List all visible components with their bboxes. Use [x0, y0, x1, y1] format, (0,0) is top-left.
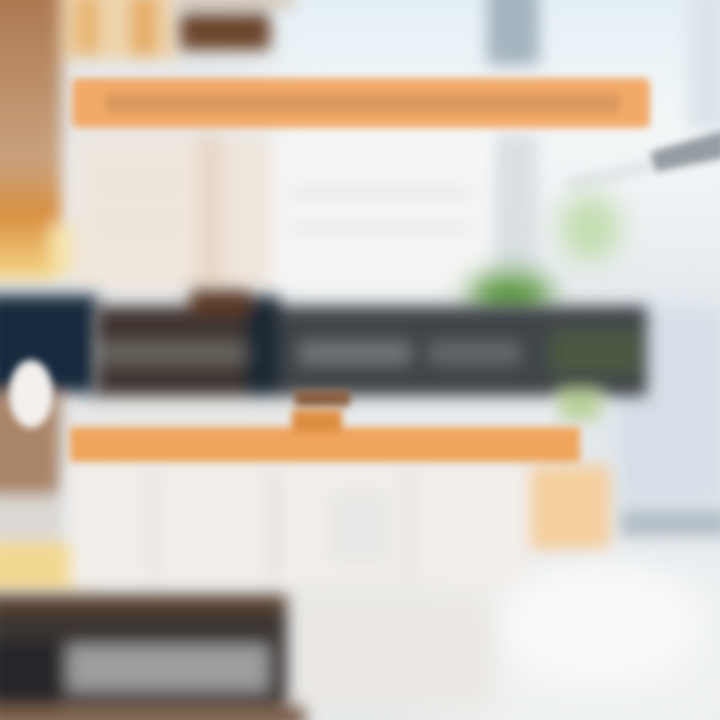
background: wood wall left [0, 0, 177, 280]
icon: white circular badge [9, 360, 53, 428]
panel: lower white table [70, 465, 610, 590]
icon: green plant [468, 194, 620, 315]
panel: lower-right pale block [292, 565, 700, 710]
background: window frame column [487, 0, 720, 536]
panel: upper white content [72, 135, 487, 293]
background: hanging dark fixture top [175, 0, 295, 50]
panel: dark middle band [95, 290, 647, 420]
background: ceiling lamp [565, 130, 720, 195]
panel: bottom dark block [0, 595, 305, 720]
heading band: top orange [72, 78, 650, 128]
heading band: lower orange [70, 390, 580, 462]
background: dark left block [0, 295, 97, 590]
